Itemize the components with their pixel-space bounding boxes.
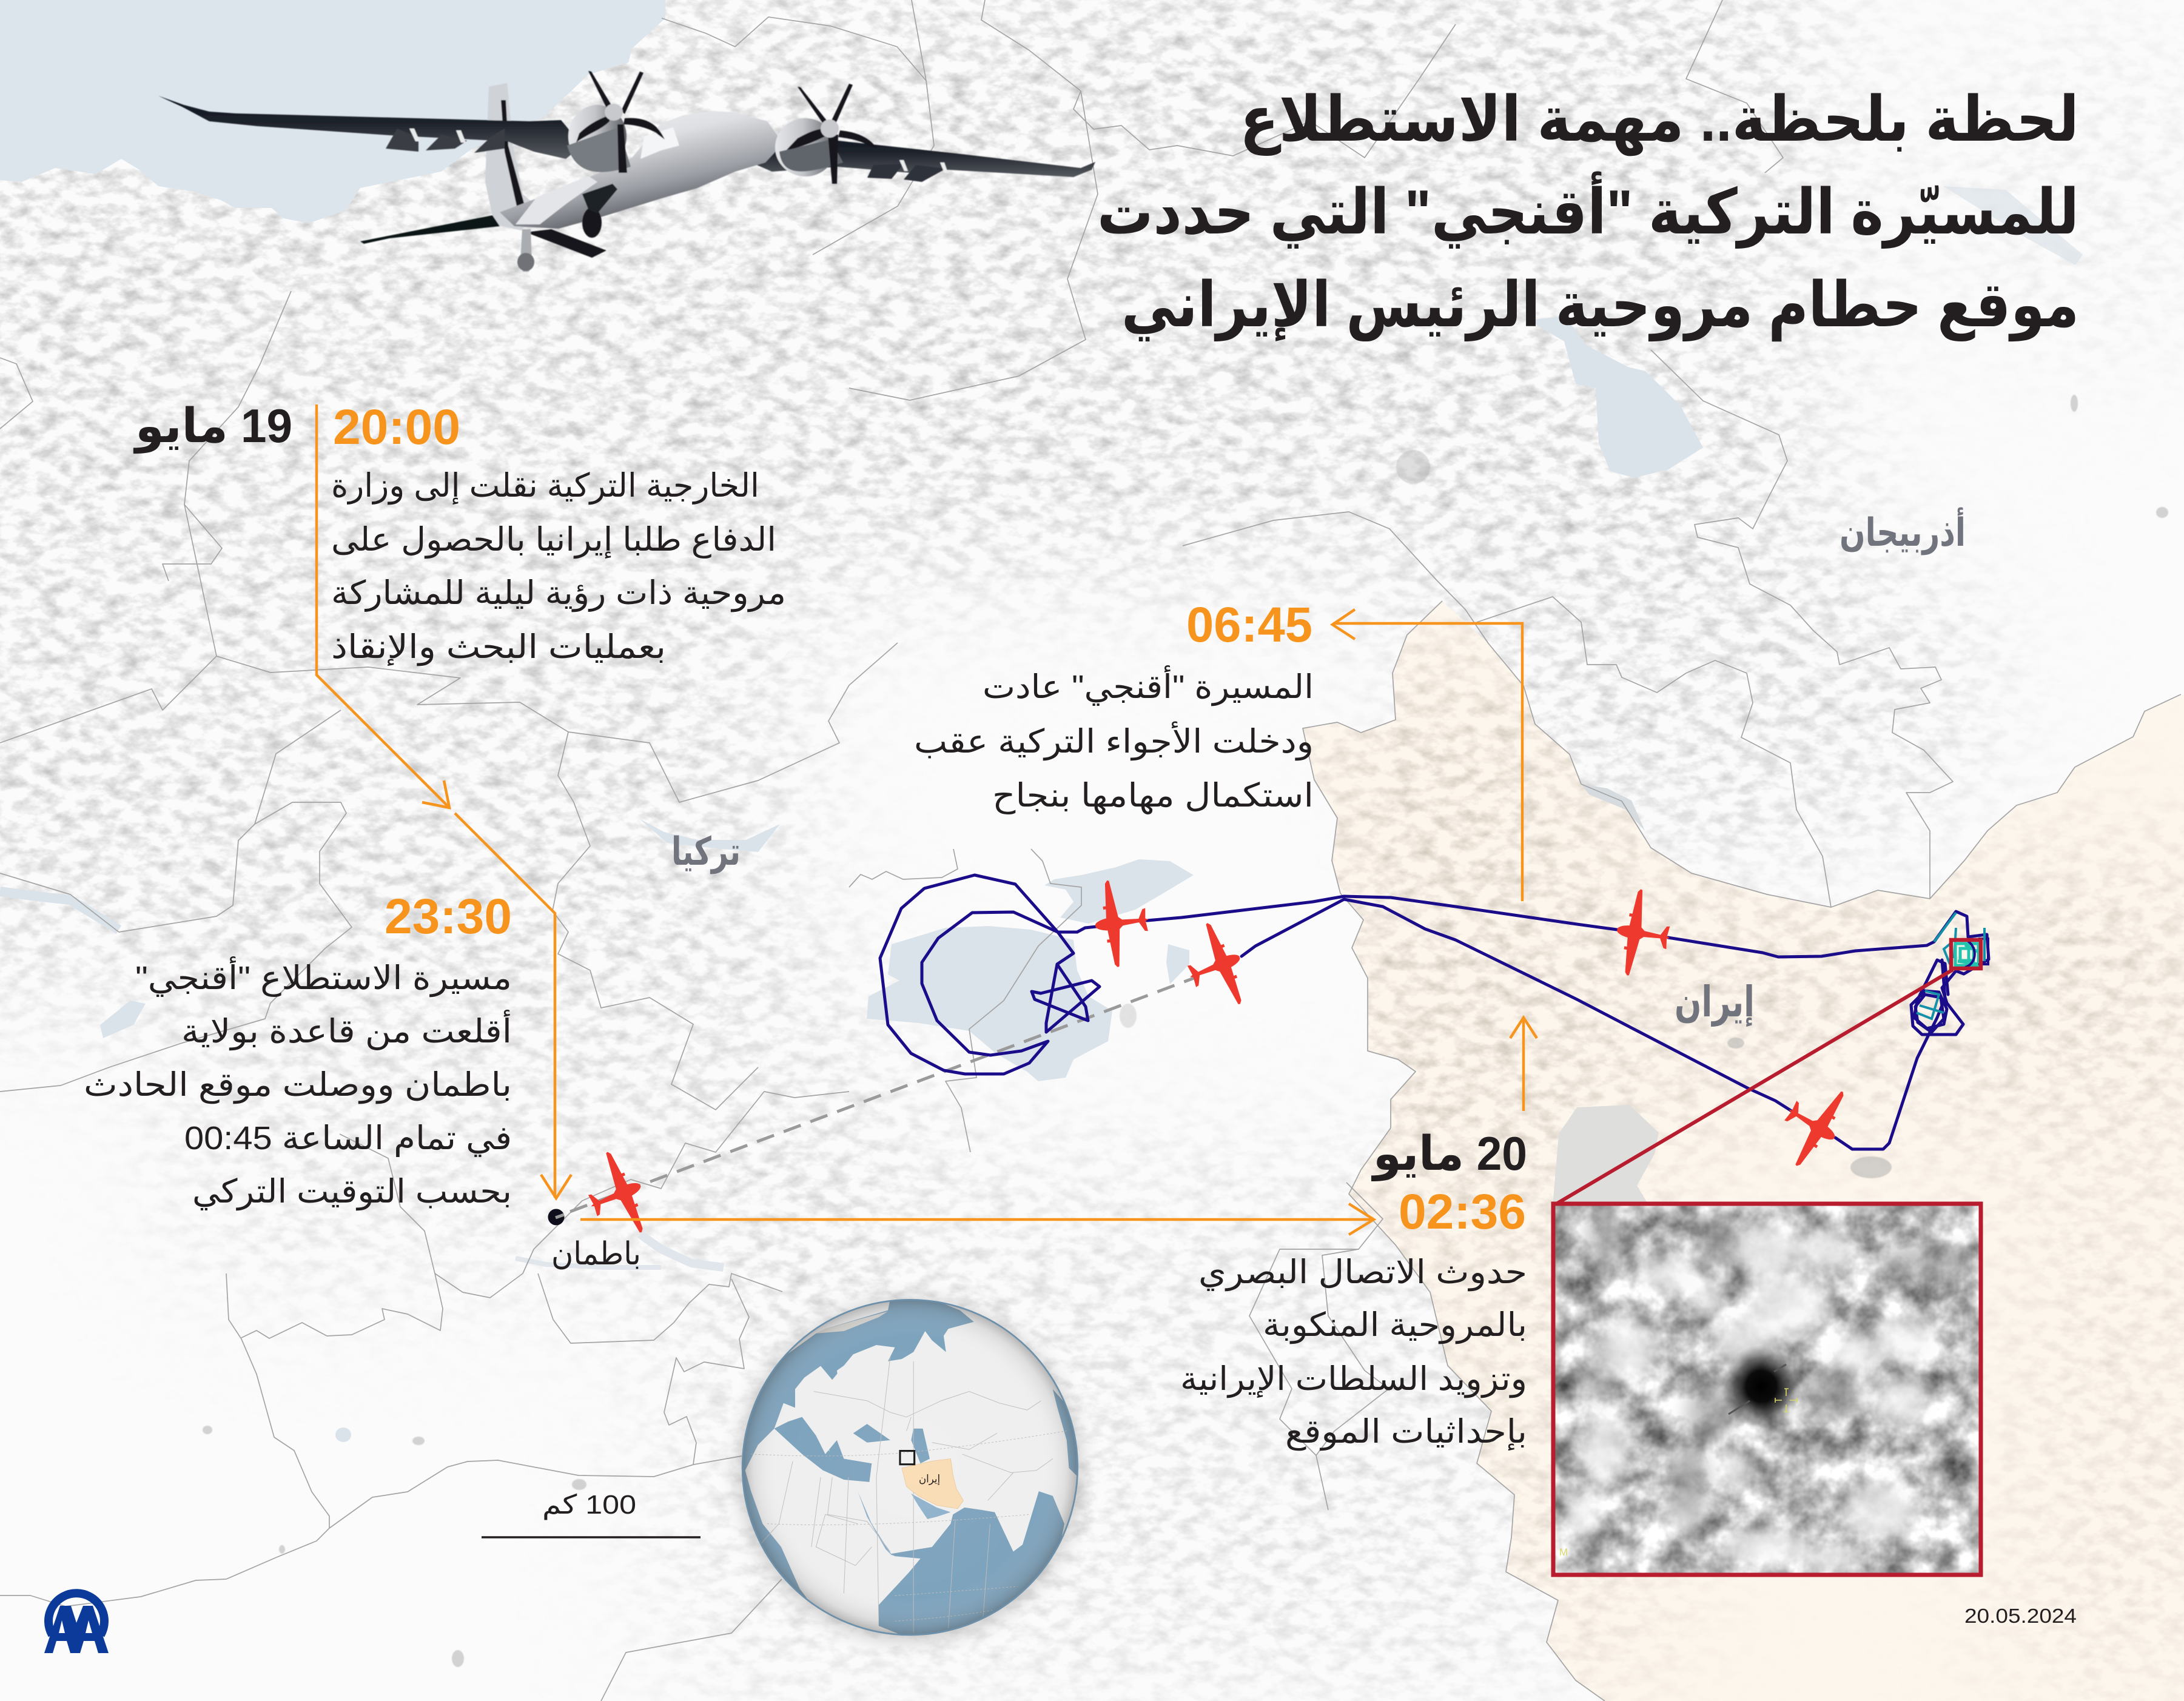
time: 20:00	[333, 400, 460, 455]
tail	[360, 215, 500, 244]
date: 20 مايو	[1371, 1127, 1527, 1181]
label: Azerbaijan: أذربيجان	[1840, 507, 1966, 555]
label: Iran: إيران	[1675, 978, 1755, 1027]
marker: drone 5	[574, 1146, 657, 1247]
right wing	[750, 133, 1095, 177]
timeline block: 19 May 20:00	[133, 399, 786, 666]
marker: drone 3	[1610, 887, 1677, 981]
body text: مروحية ذات رؤية ليلية للمشاركة	[331, 575, 786, 612]
dashed outbound line	[570, 978, 1195, 1212]
locator globe	[737, 1297, 1081, 1642]
country labels	[671, 507, 1966, 1027]
arrow: 02:36 up	[1510, 1018, 1537, 1111]
flight route with track and dashed outbound line	[570, 875, 1989, 1212]
marker: drone 2	[1174, 917, 1256, 1018]
lakes	[100, 186, 2083, 1442]
body text: ودخلت الأجواء التركية عقب	[914, 721, 1314, 760]
body text: بالمروحية المنكوبة	[1263, 1307, 1527, 1344]
body text	[84, 956, 512, 1210]
timeline block: 20 May 02:36	[1180, 1127, 1527, 1451]
inset frame	[1553, 1204, 1981, 1575]
logo: Anadolu Agency	[44, 1593, 109, 1653]
left wing	[158, 96, 582, 159]
inset thermal image	[1553, 1201, 1981, 1575]
body text	[914, 665, 1314, 814]
time: 02:36	[1399, 1184, 1526, 1240]
marker: drone 4	[1766, 1073, 1857, 1175]
city name: باطمان	[551, 1236, 641, 1272]
body text: أقلعت من قاعدة بولاية	[181, 1010, 512, 1050]
body text: بحسب التوقيت التركي	[192, 1173, 512, 1210]
body text: في تمام الساعة 00:45	[184, 1120, 512, 1157]
drone photo	[158, 71, 1095, 272]
return track	[1147, 896, 1989, 1035]
title	[1097, 84, 2079, 342]
time: 23:30	[385, 889, 512, 944]
date: 19 مايو	[133, 399, 292, 454]
title: للمسيّرة التركية "أقنجي" التي حددت	[1097, 171, 2079, 249]
connector line	[1554, 970, 1953, 1205]
crash site connector	[1554, 940, 1981, 1205]
locator square	[900, 1451, 915, 1464]
city blotches	[203, 395, 2168, 1667]
arrow: 20:00 to 23:30	[317, 404, 571, 1198]
city dot	[548, 1209, 564, 1225]
graticule and borders	[751, 1357, 1067, 1633]
body text: الخارجية التركية نقلت إلى وزارة	[331, 468, 759, 505]
arrow: 02:36 to 06:45	[1332, 609, 1522, 901]
body text: مسيرة الاستطلاع "أقنجي"	[135, 956, 512, 997]
body text: وتزويد السلطات الإيرانية	[1180, 1361, 1527, 1398]
body text	[1180, 1254, 1527, 1451]
title: لحظة بلحظة.. مهمة الاستطلاع	[1240, 84, 2079, 156]
label: Turkey: تركيا	[671, 830, 741, 874]
arrow: Batman to 02:36	[580, 1204, 1374, 1235]
engines	[568, 105, 627, 168]
Iran on globe	[902, 1459, 963, 1509]
crescent and star track	[880, 875, 1100, 1074]
date stamp: 20.05.2024	[1964, 1605, 2077, 1627]
scale label: 100 كم	[542, 1490, 636, 1520]
propellers	[576, 71, 877, 184]
body text: بإحداثيات الموقع	[1285, 1414, 1527, 1451]
city marker: Batman	[548, 1209, 641, 1272]
sea: Black Sea	[0, 0, 665, 223]
body text: حدوث الاتصال البصري	[1198, 1254, 1527, 1291]
oceans	[737, 1297, 1081, 1640]
crosshair	[1775, 1389, 1797, 1412]
body text: المسيرة "أقنجي" عادت	[983, 665, 1314, 706]
outbound track east	[1242, 899, 1945, 1149]
landing gear	[582, 207, 602, 238]
body text: استكمال مهامها بنجاح	[992, 777, 1314, 814]
crash site square	[1951, 940, 1981, 968]
title: موقع حطام مروحية الرئيس الإيراني	[1121, 270, 2079, 342]
wing flaps	[386, 129, 505, 153]
teal search pattern	[1917, 913, 1988, 1019]
time: 06:45	[1186, 597, 1312, 653]
image mark: M	[1559, 1546, 1568, 1558]
marker: drone 1	[1090, 876, 1154, 969]
red drone markers	[574, 876, 1857, 1247]
globe label: إيران	[919, 1473, 940, 1486]
vertical fin	[485, 83, 537, 230]
timeline block: 23:30	[84, 889, 512, 1210]
body text	[331, 468, 786, 666]
grey lake near crash site	[1553, 1105, 1659, 1207]
scale line	[482, 1536, 701, 1538]
body text: الدفاع طلبا إيرانيا بالحصول على	[331, 522, 776, 559]
body text: بعمليات البحث والإنقاذ	[331, 629, 666, 666]
fuselage	[500, 111, 779, 229]
timeline block: 06:45	[914, 597, 1314, 814]
body text: باطمان ووصلت موقع الحادث	[84, 1067, 512, 1104]
